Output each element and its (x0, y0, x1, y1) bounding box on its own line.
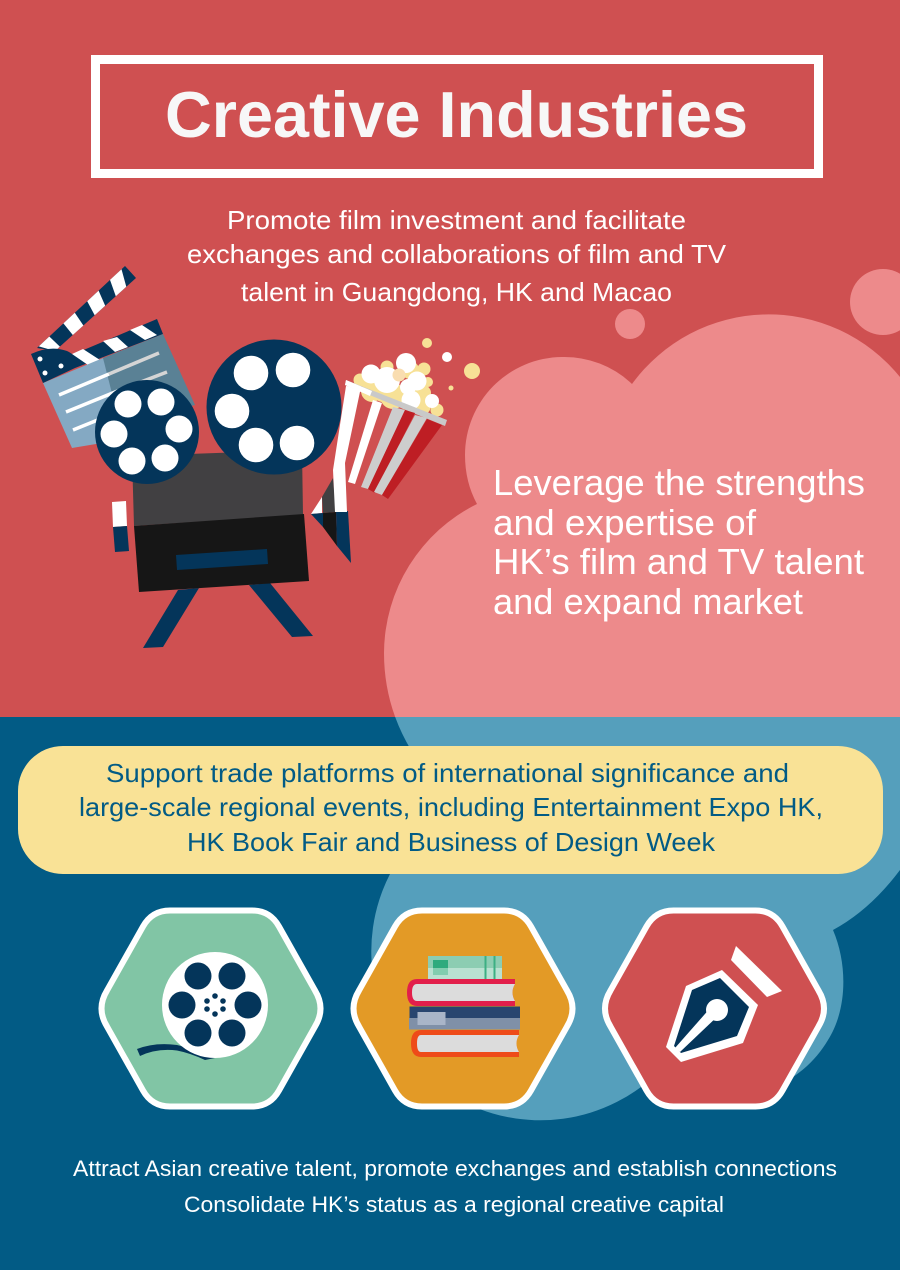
icon: popcorn (345, 338, 480, 499)
callout: yellow trade platforms banner: large-scale regional events, including Entertainment Expo HK, (79, 792, 823, 822)
panel: blue lower background (0, 717, 900, 1270)
title box (96, 60, 818, 174)
intro text: exchanges and collaborations of film and TV (187, 239, 727, 269)
icon: books hexagon (354, 910, 572, 1106)
callout: yellow trade platforms banner: Support trade platforms of international significance and (106, 758, 789, 788)
icon: film projector (95, 340, 361, 648)
intro text (187, 205, 727, 307)
callout text in cloud: and expand market (493, 581, 803, 622)
icon: clapperboard (31, 266, 195, 448)
callout text in cloud: and expertise of (493, 502, 757, 543)
closing text (73, 1156, 837, 1217)
icon: film reel hexagon (102, 910, 320, 1106)
intro text: Promote film investment and facilitate (227, 205, 686, 235)
intro text: talent in Guangdong, HK and Macao (241, 277, 672, 307)
icon: pen nib hexagon (605, 910, 824, 1106)
closing text: Attract Asian creative talent, promote exchanges and establish connections (73, 1156, 837, 1181)
title box: Creative Industries (165, 78, 748, 151)
panel: red upper background (0, 0, 900, 717)
callout text in cloud: HK’s film and TV talent (493, 541, 864, 582)
callout: yellow trade platforms banner (18, 746, 883, 874)
callout text in cloud (493, 462, 865, 622)
callout: yellow trade platforms banner: HK Book Fair and Business of Design Week (187, 827, 716, 857)
callout text in cloud: Leverage the strengths (493, 462, 865, 503)
closing text: Consolidate HK’s status as a regional creative capital (184, 1192, 724, 1217)
cloud shape spanning both panels (371, 269, 900, 1120)
